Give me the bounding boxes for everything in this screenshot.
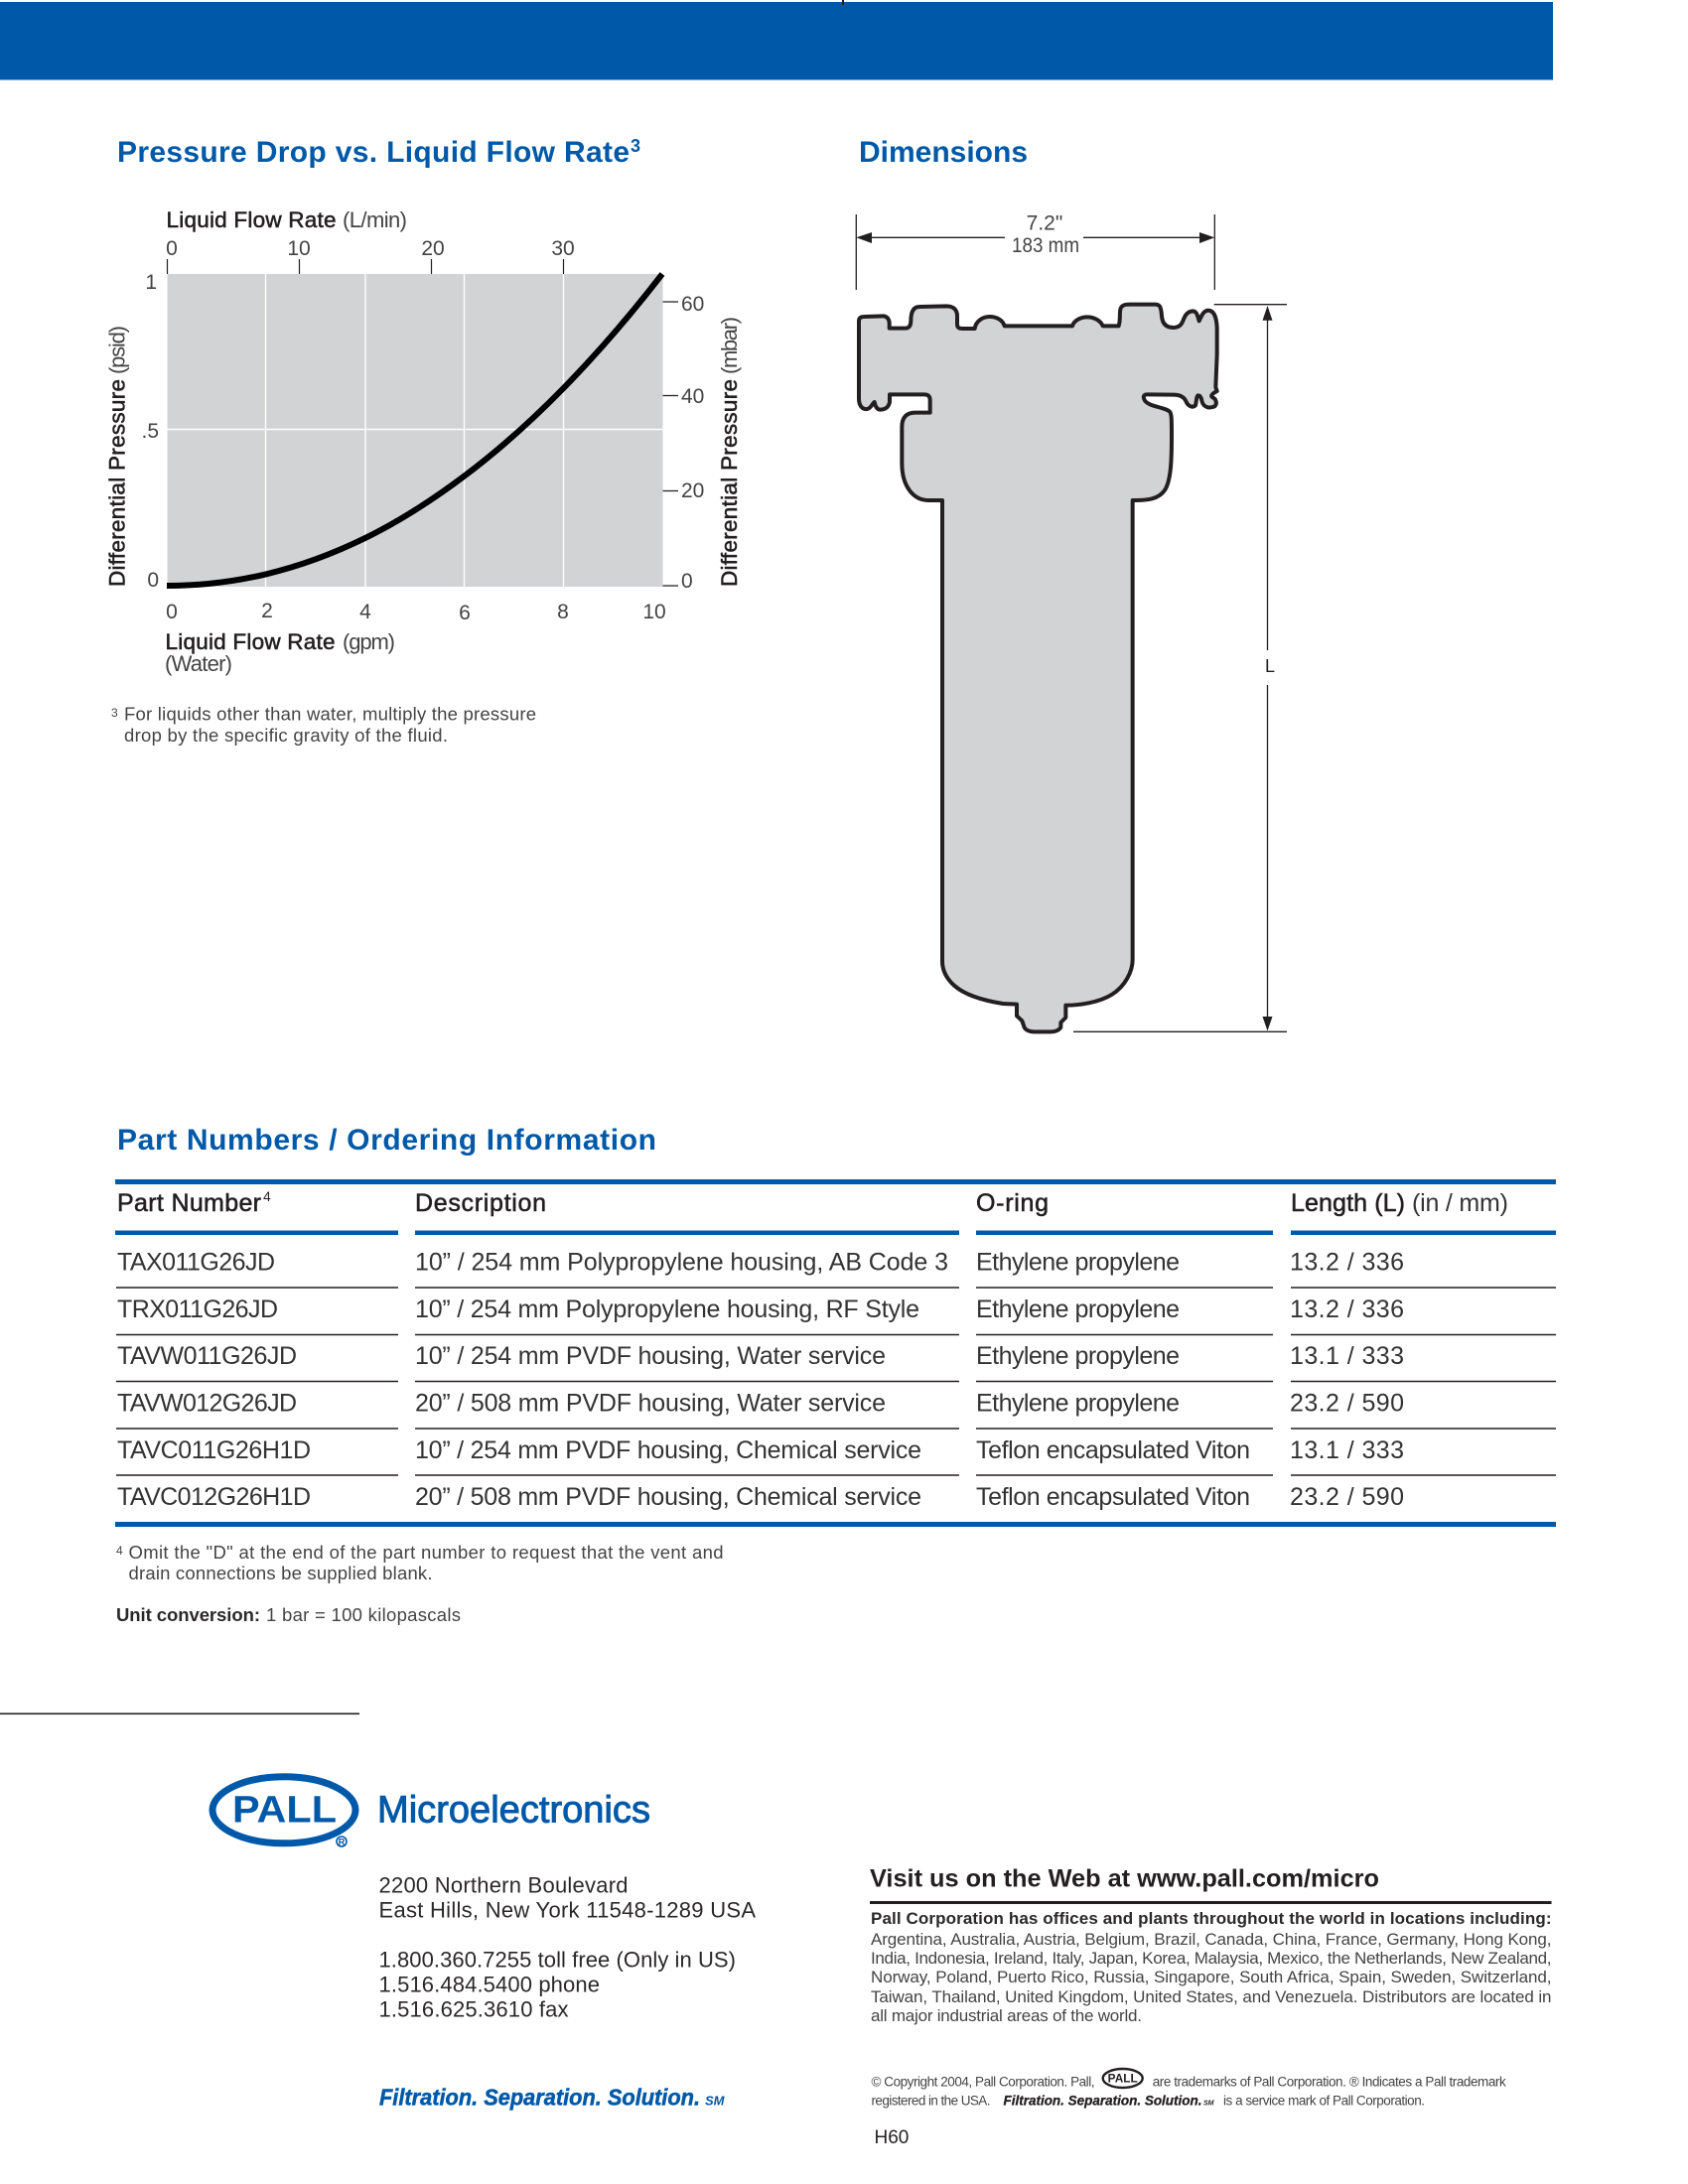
- locations paragraph: Norway, Poland, Puerto Rico, Russia, Singapore, South Africa, Spain, Sweden, Switzerland,: [871, 1968, 1551, 1986]
- footnote 4: 4: [116, 1544, 123, 1558]
- row: TRX011G26JD: Ethylene propylene: [976, 1296, 1180, 1323]
- row: TAVC012G26H1D: 20” / 508 mm PVDF housing, Chemical service: [415, 1483, 921, 1511]
- row: TAVW012G26JD: TAVW012G26JD: [117, 1390, 297, 1418]
- row: TAVW011G26JD: [117, 1342, 1404, 1370]
- row: TAVC011G26H1D: [117, 1436, 1404, 1464]
- dimension: length L: [1073, 305, 1287, 1031]
- top axis: liters per minute: 0: [166, 237, 178, 260]
- row: TRX011G26JD: 13.2 / 336: [1290, 1296, 1404, 1323]
- web rule: [870, 1901, 1551, 1904]
- locations paragraph: all major industrial areas of the world.: [871, 2006, 1142, 2025]
- row: TAX011G26JD: [117, 1249, 1404, 1277]
- left axis: psid: .5: [141, 420, 159, 443]
- address and phone: 1.516.484.5400 phone: [379, 1973, 600, 1997]
- brand: Microelectronics: Microelectronics: [377, 1790, 650, 1832]
- row: TAVW011G26JD: 13.1 / 333: [1290, 1342, 1404, 1370]
- table header: 4: [263, 1188, 271, 1204]
- copyright notice: is a service mark of Pall Corporation.: [1223, 2094, 1425, 2109]
- bottom axis: gallons per minute: [165, 600, 666, 676]
- dimension: length L: L: [1265, 656, 1275, 676]
- copyright notice: SM: [1203, 2101, 1214, 2108]
- footer rule: [0, 1713, 359, 1714]
- row: TAX011G26JD: Ethylene propylene: [976, 1249, 1180, 1277]
- logo: Pall: PALL: [232, 1790, 337, 1832]
- row: TAX011G26JD: TAX011G26JD: [117, 1249, 275, 1277]
- heading: pressure drop: Pressure Drop vs. Liquid Flow Rate: [117, 136, 630, 169]
- copyright notice: are trademarks of Pall Corporation. ® Indicates a Pall trademark: [1153, 2075, 1506, 2090]
- footnote 4: drain connections be supplied blank.: [129, 1563, 433, 1583]
- top axis: liters per minute: [166, 207, 575, 274]
- right axis: mbar: (mbar): [717, 317, 742, 374]
- locations paragraph: India, Indonesia, Ireland, Italy, Japan, Korea, Malaysia, Mexico, the Netherlands, New Zealand,: [871, 1949, 1551, 1968]
- row: TAVW011G26JD: 10” / 254 mm PVDF housing, Water service: [415, 1342, 886, 1370]
- locations paragraph: Taiwan, Thailand, United Kingdom, United States, and Venezuela. Distributors are located in: [871, 1987, 1551, 2006]
- logo: Pall: [212, 1777, 355, 1846]
- right axis: mbar: 60: [681, 293, 704, 316]
- table header: Length (L): [1291, 1189, 1405, 1217]
- footnote 4: [116, 1542, 723, 1583]
- left axis: psid: Differential Pressure: [105, 379, 129, 587]
- address and phone: East Hills, New York 11548-1289 USA: [379, 1898, 756, 1923]
- row: TAVW011G26JD: Ethylene propylene: [976, 1342, 1180, 1370]
- row: TAVC011G26H1D: Teflon encapsulated Viton: [976, 1436, 1250, 1464]
- row: TAVW012G26JD: 23.2 / 590: [1290, 1390, 1404, 1418]
- bottom axis: gallons per minute: (Water): [165, 651, 232, 676]
- address and phone: 1.516.625.3610 fax: [379, 1997, 568, 2022]
- copyright notice: Filtration. Separation. Solution.: [1003, 2093, 1201, 2109]
- logo: Pall: R: [339, 1837, 346, 1846]
- unit conversion note: Unit conversion:: [116, 1604, 260, 1625]
- locations paragraph: Pall Corporation has offices and plants throughout the world in locations including:: [871, 1909, 1551, 1928]
- bottom axis: gallons per minute: 2: [261, 600, 273, 622]
- chart: pressure drop vs flow rate: [105, 207, 742, 676]
- row: TAX011G26JD: 13.2 / 336: [1290, 1249, 1404, 1277]
- left axis: psid: (psid): [105, 326, 129, 374]
- left axis: psid: 0: [147, 569, 159, 592]
- table header: O-ring: [976, 1189, 1049, 1217]
- small logo: Pall: [1103, 2069, 1143, 2088]
- copyright notice: registered in the USA.: [872, 2094, 991, 2109]
- row: TRX011G26JD: [117, 1296, 1404, 1323]
- row: TRX011G26JD: TRX011G26JD: [117, 1296, 278, 1323]
- row: TRX011G26JD: 10” / 254 mm Polypropylene housing, RF Style: [415, 1296, 919, 1323]
- top banner: [0, 0, 1553, 79]
- footnote 3: [111, 703, 536, 746]
- bottom axis: gallons per minute: (gpm): [343, 629, 395, 654]
- table header: (in / mm): [1412, 1189, 1508, 1217]
- housing outline drawing: [859, 305, 1217, 1031]
- table header: Description: [415, 1189, 546, 1217]
- unit conversion note: 1 bar = 100 kilopascals: [266, 1604, 461, 1625]
- row: TAX011G26JD: 10” / 254 mm Polypropylene housing, AB Code 3: [415, 1249, 948, 1277]
- top axis: liters per minute: 30: [551, 237, 575, 260]
- footnote 3: 3: [111, 706, 118, 720]
- bottom axis: gallons per minute: Liquid Flow Rate: [165, 629, 336, 654]
- small logo: Pall: PALL: [1108, 2073, 1138, 2085]
- bottom axis: gallons per minute: 8: [557, 601, 569, 623]
- top axis: liters per minute: 10: [287, 237, 311, 260]
- left axis: psid: [105, 271, 159, 592]
- heading: dimensions: Dimensions: [859, 136, 1028, 169]
- address and phone: 2200 Northern Boulevard: [379, 1873, 628, 1898]
- bottom axis: gallons per minute: 6: [459, 602, 471, 624]
- chart plot area: [167, 274, 663, 587]
- dimension: width 7.2 in: [856, 212, 1214, 290]
- footnote 3: drop by the specific gravity of the fluid.: [124, 725, 448, 746]
- heading: part numbers: Part Numbers / Ordering Information: [117, 1124, 656, 1157]
- table header: Part Number: [117, 1189, 261, 1217]
- unit conversion note: [116, 1604, 461, 1625]
- row: TAVW012G26JD: 20” / 508 mm PVDF housing, Water service: [415, 1390, 886, 1418]
- row: TAVC012G26H1D: Teflon encapsulated Viton: [976, 1483, 1250, 1511]
- row: TAVW012G26JD: [117, 1390, 1404, 1418]
- top axis: liters per minute: Liquid Flow Rate: [167, 207, 336, 232]
- tagline: Filtration. Separation. Solution.: [379, 2085, 700, 2111]
- bottom axis: gallons per minute: 4: [359, 601, 371, 623]
- dimension: width 7.2 in: 7.2": [1027, 212, 1062, 235]
- right axis: mbar: 40: [681, 385, 704, 408]
- footnote 3: For liquids other than water, multiply the pressure: [124, 703, 536, 725]
- locations paragraph: Argentina, Australia, Austria, Belgium, Brazil, Canada, China, France, Germany, Hong Kong,: [871, 1930, 1551, 1949]
- table header: [117, 1188, 1508, 1217]
- bottom axis: gallons per minute: 10: [642, 601, 666, 623]
- web address heading: Visit us on the Web at www.pall.com/micro: [870, 1865, 1379, 1893]
- dimension: width 7.2 in: 183 mm: [1012, 234, 1079, 257]
- row: TAVW011G26JD: TAVW011G26JD: [117, 1342, 297, 1370]
- document code: H60: [874, 2127, 909, 2148]
- right axis: mbar: [663, 293, 742, 593]
- right axis: mbar: 0: [681, 570, 693, 593]
- bottom axis: gallons per minute: 0: [166, 601, 178, 623]
- chart curve: [167, 274, 662, 586]
- copyright notice: © Copyright 2004, Pall Corporation. Pall,: [872, 2075, 1094, 2090]
- address and phone: [379, 1873, 756, 2022]
- right axis: mbar: Differential Pressure: [717, 379, 742, 587]
- row: TAVC012G26H1D: 23.2 / 590: [1290, 1483, 1404, 1511]
- table rules: [115, 1179, 1556, 1527]
- footnote 4: Omit the "D" at the end of the part number to request that the vent and: [129, 1542, 723, 1563]
- row: TAVC011G26H1D: 10” / 254 mm PVDF housing, Chemical service: [415, 1436, 921, 1464]
- locations paragraph: [871, 1909, 1551, 2025]
- row: TAVC012G26H1D: TAVC012G26H1D: [117, 1483, 311, 1511]
- row: TAVC012G26H1D: [117, 1483, 1404, 1511]
- row: TAVC011G26H1D: 13.1 / 333: [1290, 1436, 1404, 1464]
- row: TAVW012G26JD: Ethylene propylene: [976, 1390, 1180, 1418]
- top axis: liters per minute: 20: [421, 237, 445, 260]
- copyright notice: [872, 2069, 1506, 2109]
- address and phone: 1.800.360.7255 toll free (Only in US): [379, 1948, 736, 1973]
- top axis: liters per minute: (L/min): [343, 207, 407, 232]
- tagline: SM: [705, 2094, 726, 2109]
- right axis: mbar: 20: [681, 479, 704, 502]
- heading: pressure drop: 3: [631, 136, 640, 156]
- ordering table: [115, 1179, 1556, 1527]
- row: TAVC011G26H1D: TAVC011G26H1D: [117, 1436, 311, 1464]
- left axis: psid: 1: [145, 271, 157, 294]
